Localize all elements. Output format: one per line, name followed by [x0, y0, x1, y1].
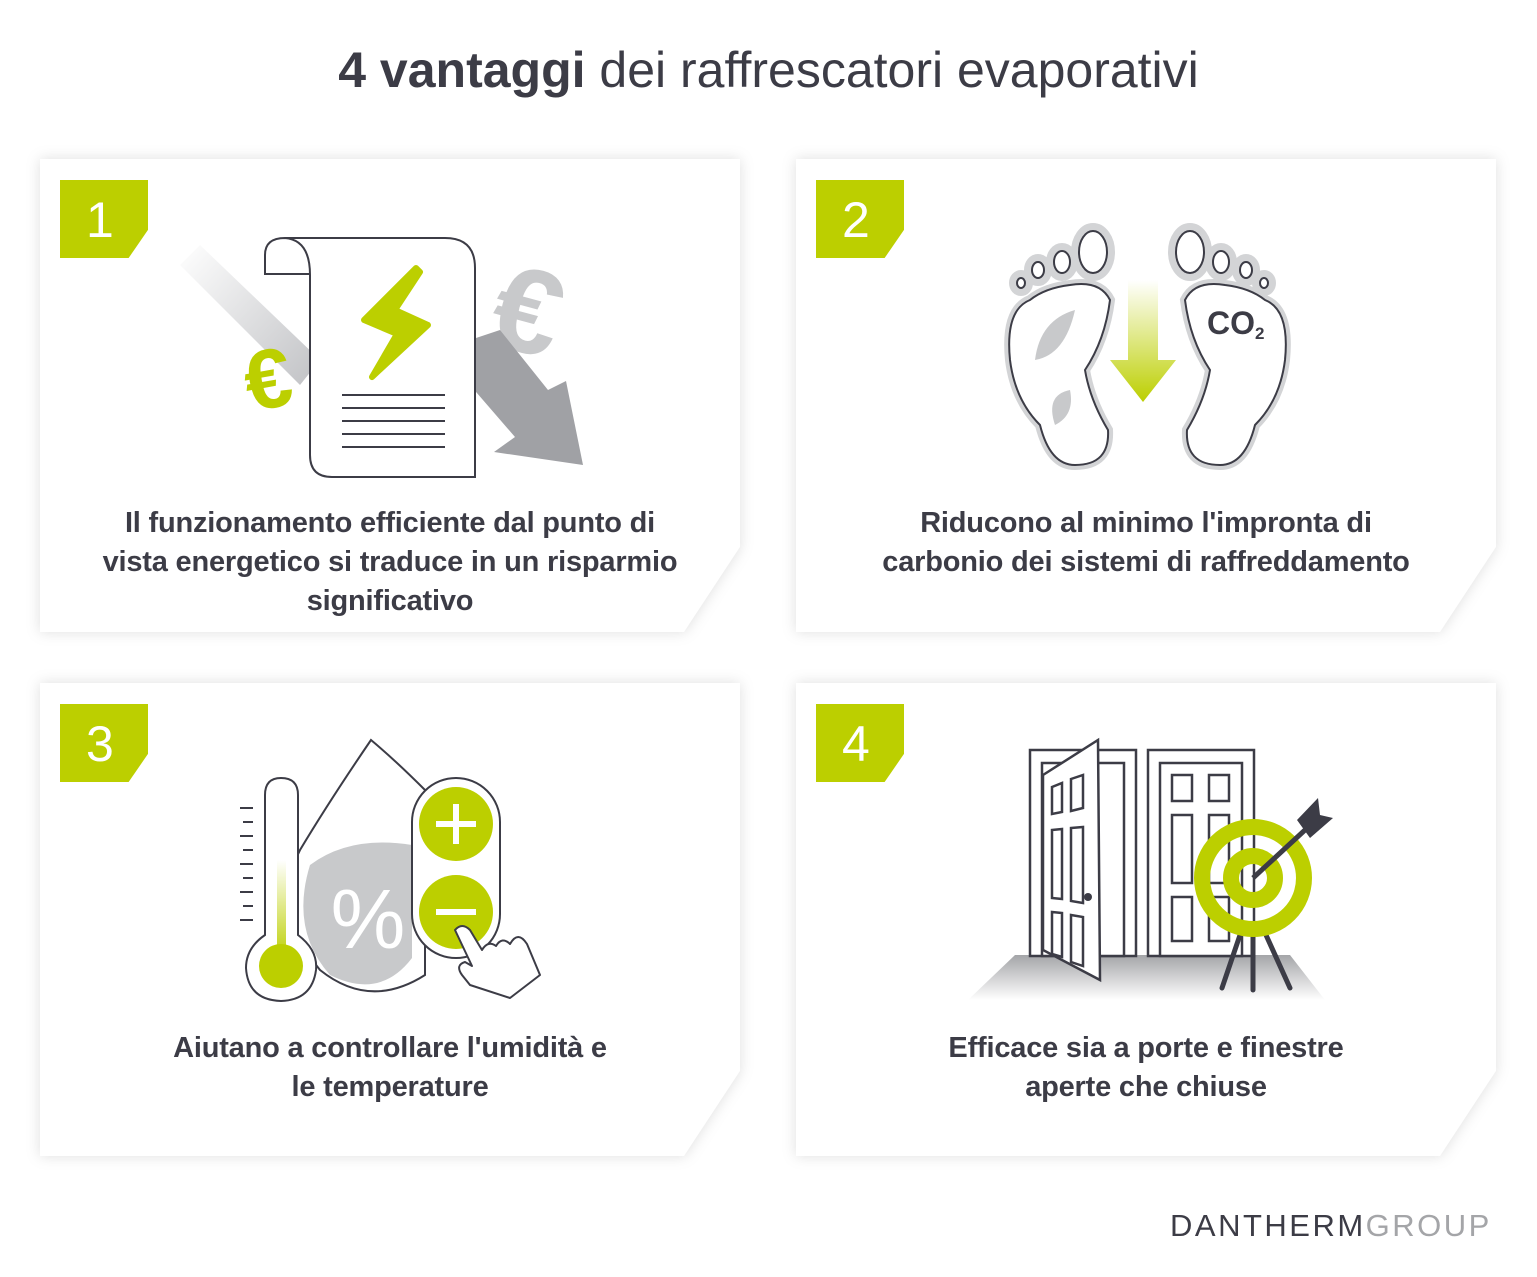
text 1: Il funzionamento efficiente dal punto di: [125, 507, 655, 539]
icon: thermometer, humidity drop and controls: [240, 738, 541, 1002]
text 1: significativo: [307, 585, 473, 617]
text 2: carbonio dei sistemi di raffreddamento: [882, 546, 1410, 578]
panel: card 4: [792, 678, 1500, 1160]
icon: doors and target: [973, 738, 1333, 996]
text 1: vista energetico si traduce in un risparmio: [103, 546, 677, 578]
icon: energy bill with falling cost: [189, 237, 583, 478]
panel: card 2: [792, 154, 1500, 636]
badge 2: [816, 180, 904, 258]
badge 3: 3: [86, 716, 114, 772]
text 2: Riducono al minimo l'impronta di: [920, 507, 1372, 539]
icon: energy bill with falling cost: €: [237, 329, 299, 429]
badge 1: 1: [86, 192, 114, 248]
text 4: Efficace sia a porte e finestre: [948, 1032, 1344, 1064]
text 3: le temperature: [291, 1071, 489, 1103]
badge 2: 2: [842, 192, 870, 248]
text 3: Aiutano a controllare l'umidità e: [173, 1032, 607, 1064]
icon: footprints with CO2: [1004, 223, 1291, 470]
badge 3: [60, 704, 148, 782]
icon: footprints with CO2: CO: [1207, 305, 1255, 341]
icon: energy bill with falling cost: €: [478, 238, 577, 384]
badge 4: [816, 704, 904, 782]
badge 4: 4: [842, 716, 870, 772]
icon: thermometer, humidity drop and controls: %: [331, 872, 405, 966]
title: 4 vantaggi dei raffrescatori evaporativi: [338, 42, 1199, 98]
panel: card 1: [36, 154, 744, 636]
text 4: [948, 1032, 1344, 1103]
text 2: [882, 507, 1410, 578]
logo: DANTHERMGROUP: [1170, 1208, 1492, 1243]
icon: footprints with CO2: 2: [1255, 324, 1264, 343]
text 4: aperte che chiuse: [1025, 1071, 1267, 1103]
panel: card 3: [36, 678, 744, 1160]
text 1: [102, 507, 677, 617]
badge 1: [60, 180, 148, 258]
text 3: [173, 1032, 607, 1103]
